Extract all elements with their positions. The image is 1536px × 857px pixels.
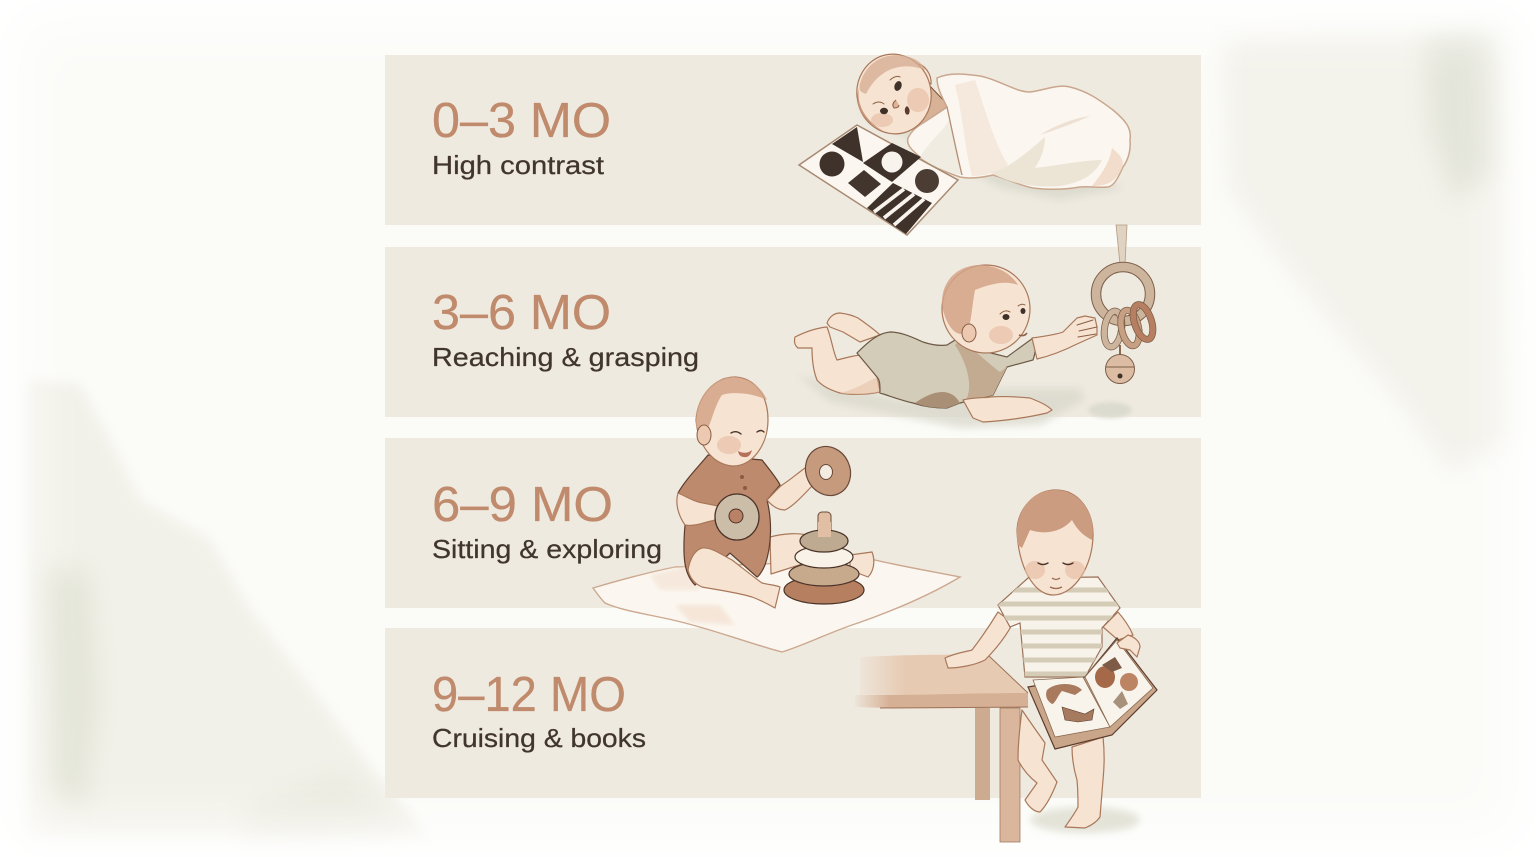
back leg	[827, 313, 880, 342]
panel: 6-9 months	[385, 438, 1201, 608]
bodysuit	[857, 332, 1035, 408]
hanging rattle	[1096, 225, 1157, 384]
near leg	[688, 548, 780, 608]
supporting arm	[963, 397, 1052, 422]
legs	[1018, 710, 1057, 812]
romper	[678, 455, 780, 585]
baby neck	[915, 84, 950, 128]
panel: 0-3 months	[385, 55, 1201, 225]
illustration: sitting baby with stacking rings on blanket	[593, 377, 960, 652]
age heading: 9-12 MO: 9–12 MO	[432, 668, 626, 722]
head	[942, 265, 1030, 353]
label: Reaching and grasping: Reaching & grasping	[432, 342, 699, 372]
striped shirt	[990, 577, 1125, 677]
held ring right	[797, 439, 859, 503]
head	[696, 377, 768, 466]
left arm	[945, 612, 1013, 668]
illustration: toddler cruising at table with book	[855, 490, 1157, 842]
baby head	[849, 47, 939, 141]
head	[1017, 490, 1093, 595]
label: Cruising and books: Cruising & books	[432, 723, 646, 753]
panel: 3-6 months	[385, 247, 1201, 417]
table	[855, 655, 1028, 842]
far foot	[850, 552, 874, 577]
label: Sitting and exploring: Sitting & exploring	[432, 534, 662, 564]
front leg	[794, 327, 880, 394]
age heading: 0-3 MO: 0–3 MO	[432, 94, 611, 148]
far leg	[770, 534, 815, 574]
right arm	[1103, 612, 1133, 640]
high contrast card	[799, 125, 958, 235]
illustration: swaddled newborn with high contrast card	[799, 47, 1130, 235]
hand on book	[1117, 635, 1140, 657]
reaching arm	[1032, 316, 1097, 359]
panel: 9-12 months	[385, 628, 1201, 798]
open book	[1028, 638, 1157, 749]
swaddle blanket	[908, 74, 1130, 189]
illustration: tummy time baby reaching for rattle	[794, 225, 1157, 428]
play mat	[593, 560, 960, 652]
age heading: 3-6 MO: 3–6 MO	[432, 286, 611, 340]
far arm	[767, 468, 815, 510]
near arm	[677, 493, 728, 525]
stacking toy	[784, 512, 864, 604]
label: High contrast: High contrast	[432, 150, 605, 180]
held ring left	[715, 494, 759, 540]
age heading: 6-9 MO: 6–9 MO	[432, 478, 613, 532]
